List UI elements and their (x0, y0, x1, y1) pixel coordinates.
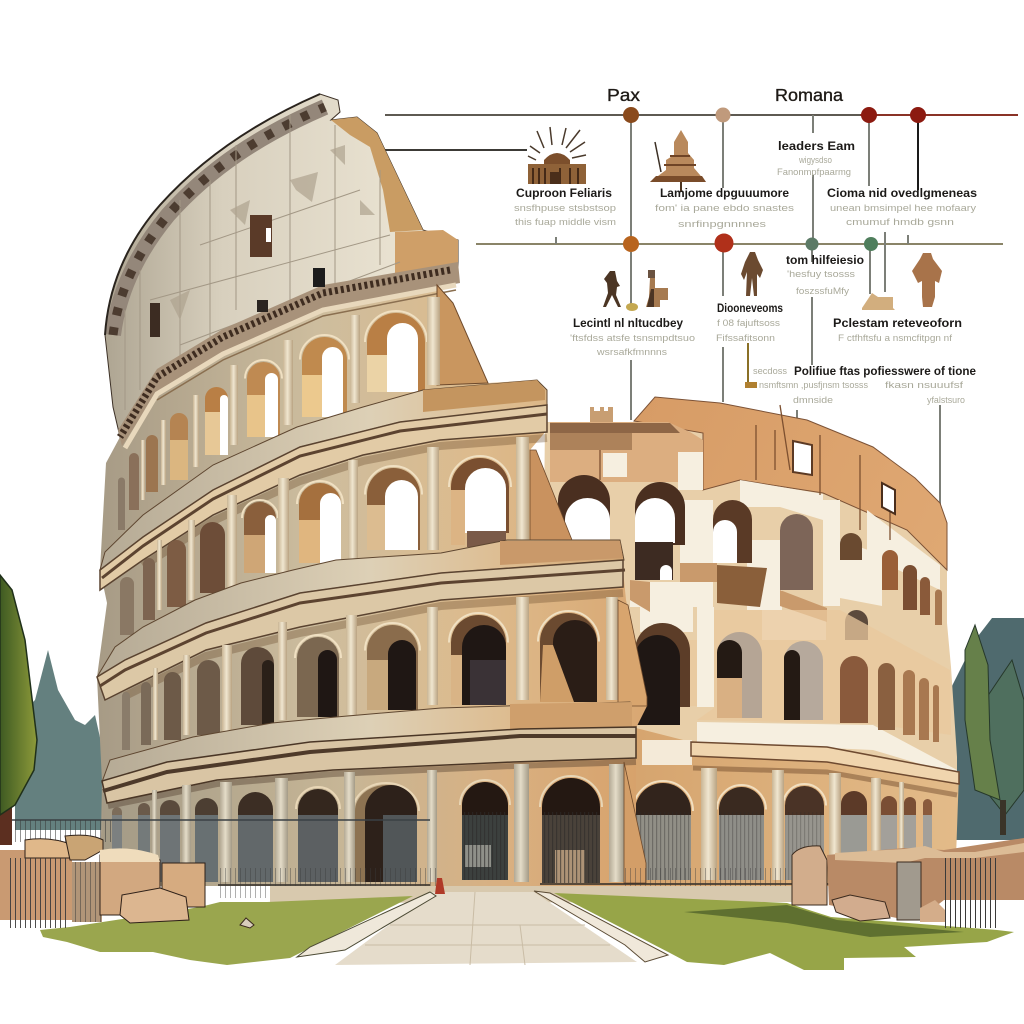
text block: tom hilfeiesio: 'hesfuy tsosss (787, 269, 855, 280)
icon: gold marker (745, 382, 757, 388)
fence across building base (12, 820, 860, 898)
iron fence (944, 858, 1000, 928)
iron fence (7, 858, 70, 928)
text block: Diooneveoms: Fifssafitsonn (716, 333, 775, 344)
gate grate (72, 862, 102, 922)
wall block (0, 850, 72, 920)
tier 2 right wall (646, 610, 951, 735)
text block: Pclestam reteveoforn: F ctfhftsfu a nsmcfitpgn nf (838, 333, 952, 344)
row U columns (141, 297, 440, 500)
timeline line upper red part (860, 114, 1018, 116)
text block: leaders Eam: leaders Eam (778, 139, 855, 153)
long wall (827, 838, 1024, 918)
timeline line upper (385, 114, 860, 116)
attic dentil blocks (113, 107, 325, 335)
text block: leaders Eam: Fanonmpfpaarmg (777, 167, 851, 178)
text block: Cioma nid ovedlgmeneas: Cioma nid ovedlgmeneas (827, 186, 977, 200)
row T buttress (530, 450, 572, 540)
tan ledges (630, 563, 827, 622)
icon: cloaked figure (912, 253, 942, 307)
balcony brown right part (423, 380, 545, 412)
title word Romana: Romana (775, 85, 843, 105)
row M columns (153, 597, 618, 740)
timeline connectors (372, 115, 1018, 505)
text block: Pclestam reteveoforn: Pclestam reteveoforn (833, 316, 962, 330)
balcony above cornice A (100, 380, 547, 570)
small rock (920, 900, 945, 922)
attic lit ledge (395, 230, 458, 282)
block 3 top (100, 848, 160, 862)
attic small window 1 (313, 268, 325, 287)
row U arches (118, 313, 425, 530)
attic small window 3 (150, 303, 160, 337)
small turret (590, 407, 613, 422)
gold leader (747, 343, 749, 385)
text block: Lecintl nl nltucdbey: Lecintl nl nltucdbey (573, 316, 683, 330)
attic wall (105, 94, 458, 437)
frieze cornice (118, 262, 460, 446)
text block: tom hilfeiesio: tom hilfeiesio (786, 253, 864, 267)
right section silhouette (540, 397, 957, 886)
attic blocks and cracks (125, 115, 400, 410)
left curb (297, 892, 436, 957)
cornice C dark moulding (103, 736, 636, 791)
cornice A band (100, 405, 547, 590)
central path (335, 892, 637, 965)
attic hole (266, 228, 271, 242)
grass shadow (684, 905, 964, 937)
leader line to temple icon (372, 149, 527, 151)
ground wall (102, 728, 636, 886)
attic tan buttress (331, 117, 423, 232)
cracks (600, 405, 890, 540)
gate (897, 862, 921, 920)
text block: Cuproon Feliaris (514, 186, 616, 228)
text block: Polifiue ftas pofiesswere of tione (753, 364, 976, 406)
text block: Lamjome dpguuumore: fom' ia pane ebdo snastes (655, 203, 794, 214)
attic top frieze (113, 107, 325, 335)
left background: cypress tree (0, 575, 37, 845)
block top 1 (25, 839, 73, 858)
text block: Cuproon Feliaris: Cuproon Feliaris (516, 186, 612, 200)
text block: tom hilfeiesio (786, 253, 864, 297)
cornice C under shadow (108, 762, 636, 806)
text block: Cuproon Feliaris: snsfhpuse stsbstsop (514, 203, 616, 214)
small seated figure (435, 878, 445, 894)
upper arcade buttress (437, 285, 488, 385)
upper band (550, 422, 703, 482)
right background: distant hills (950, 618, 1024, 840)
text block: Polifiue ftas pofiesswere of tione: secdoss (753, 366, 787, 377)
balcony above cornice C (102, 702, 630, 782)
upper band shadow (550, 423, 680, 433)
grass left (40, 896, 413, 965)
cornice C band (102, 727, 636, 803)
text block: Lecintl nl nltucdbey (570, 316, 695, 358)
balcony brown right C (510, 702, 632, 730)
text block: Polifiue ftas pofiesswere of tione: yfalstsuro (927, 395, 965, 406)
arch rings right (633, 781, 826, 811)
tier 2 arches (635, 623, 939, 742)
gate bars (72, 862, 102, 922)
row M arch rings (295, 611, 599, 658)
colosseum: left, intact section (97, 94, 647, 886)
white stone patches (603, 452, 957, 775)
row T arch rings (242, 456, 511, 518)
node upper 2 (716, 108, 730, 122)
attic large window (250, 215, 272, 257)
arcade 1 top shadow (157, 290, 456, 400)
ground shadow right (693, 768, 957, 795)
cornice B band (97, 560, 623, 700)
row T columns (157, 437, 529, 610)
stones right (792, 838, 1024, 928)
ground grates right (635, 812, 932, 880)
paved ledge (270, 886, 800, 903)
vertical connector dark (917, 115, 919, 190)
attic stains (170, 145, 375, 320)
node lower 1 (623, 236, 639, 252)
text block: Diooneveoms (716, 301, 783, 344)
grass right (554, 893, 1014, 970)
text block: Cioma nid ovedlgmeneas: cmumuf hmdb gsnn (846, 217, 954, 228)
vertical connectors (556, 115, 940, 505)
ground columns right (701, 768, 904, 880)
rock (832, 895, 890, 921)
colosseum: right, ruined section (540, 397, 959, 886)
cream block above first right arch (642, 740, 692, 765)
wall top stones (835, 843, 1024, 863)
text block: Pclestam reteveoforn (833, 316, 962, 344)
text block: leaders Eam (777, 139, 855, 178)
ground grates left (112, 812, 600, 883)
node lower 3 (806, 238, 818, 250)
path joints (365, 892, 610, 965)
text block: Lamjome dpguuumore: snrfinpgnnnnes (678, 219, 766, 230)
timeline nodes (623, 107, 926, 252)
row M buttress (618, 600, 647, 706)
row U arch rings (245, 311, 427, 378)
node upper 3 (861, 107, 877, 123)
cornice A under shadow (143, 438, 547, 566)
text block: Lecintl nl nltucdbey: 'ftsfdss atsfe tsnsmpdtsuo (570, 333, 695, 344)
node lower 4 (864, 237, 878, 251)
icon: figure with crate (646, 270, 668, 307)
node upper 4 (910, 107, 926, 123)
icon: small gold mound (626, 303, 638, 311)
block top 2 (65, 835, 103, 860)
ground tier wall right (636, 728, 959, 886)
timeline line lower (476, 243, 1003, 245)
node upper 1 (623, 107, 639, 123)
broken brown panel (717, 565, 767, 607)
tall block (792, 846, 827, 905)
node lower 2 (714, 234, 734, 252)
text block: Diooneveoms: f 08 fajuftsoss (717, 318, 780, 329)
block 3 (100, 851, 160, 915)
text block: Polifiue ftas pofiesswere of tione: fkasn nsuuufsf (885, 380, 963, 391)
text block: Cioma nid ovedlgmeneas (827, 186, 977, 228)
cornice B dark moulding (100, 570, 625, 686)
text block: tom hilfeiesio: foszssfuMfy (796, 286, 849, 297)
block 4 (162, 863, 205, 907)
cornice B under shadow (125, 593, 623, 696)
ground arches left (112, 778, 600, 883)
text block: Polifiue ftas pofiesswere of tione: Polifiue ftas pofiesswere of tione (794, 364, 976, 378)
balcony brown right B (500, 541, 623, 565)
small rock on grass (240, 918, 254, 928)
frieze band (550, 433, 632, 450)
attic top outline (105, 94, 320, 335)
text block: Cuproon Feliaris: this fuap middle vism (515, 217, 616, 228)
text block: Polifiue ftas pofiesswere of tione: dmnside (793, 395, 833, 406)
text block: Cioma nid ovedlgmeneas: unean bmsimpel hee mofaary (830, 203, 976, 214)
right upper attic wall (634, 397, 947, 570)
balcony above cornice B (97, 540, 624, 677)
ground buttress (624, 762, 646, 883)
arcade base fill (97, 270, 647, 886)
windows (793, 441, 812, 475)
lower frieze (125, 285, 456, 448)
stones left (0, 835, 205, 928)
cornice A dark moulding (102, 414, 547, 578)
left background: distant hills (15, 650, 105, 830)
tier 3 arches with white openings (558, 475, 942, 640)
row T arches (120, 458, 509, 635)
rock (120, 888, 189, 923)
text block: leaders Eam: wigysdso (798, 155, 832, 166)
text block: Lamjome dpguuumore: Lamjome dpguuumore (660, 186, 789, 200)
icon: stepped monument (650, 130, 706, 192)
ground columns left (152, 764, 624, 882)
ground arch rings left (296, 776, 602, 811)
text block: Polifiue ftas pofiesswere of tione: nsmftsmn ,pusfjnsm tsosss (759, 380, 868, 391)
title word Pax: Pax (607, 85, 640, 105)
icon: temple with rays (528, 127, 586, 184)
ground arches right (635, 783, 932, 880)
frieze dark texture (120, 270, 450, 437)
row M arches (122, 613, 597, 750)
right background: cypress trees (965, 625, 1024, 835)
text block: Lamjome dpguuumore (655, 186, 794, 230)
right curb (534, 891, 668, 962)
icon: soldier figure (603, 271, 621, 307)
attic small window 2 (257, 300, 268, 312)
icon: armored figure (741, 252, 763, 296)
ground cornice right (691, 742, 959, 784)
icon: stone block (862, 293, 895, 310)
text block: Lecintl nl nltucdbey: wsrsafkfmnnns (596, 347, 667, 358)
text block: Diooneveoms: Diooneveoms (717, 301, 783, 315)
